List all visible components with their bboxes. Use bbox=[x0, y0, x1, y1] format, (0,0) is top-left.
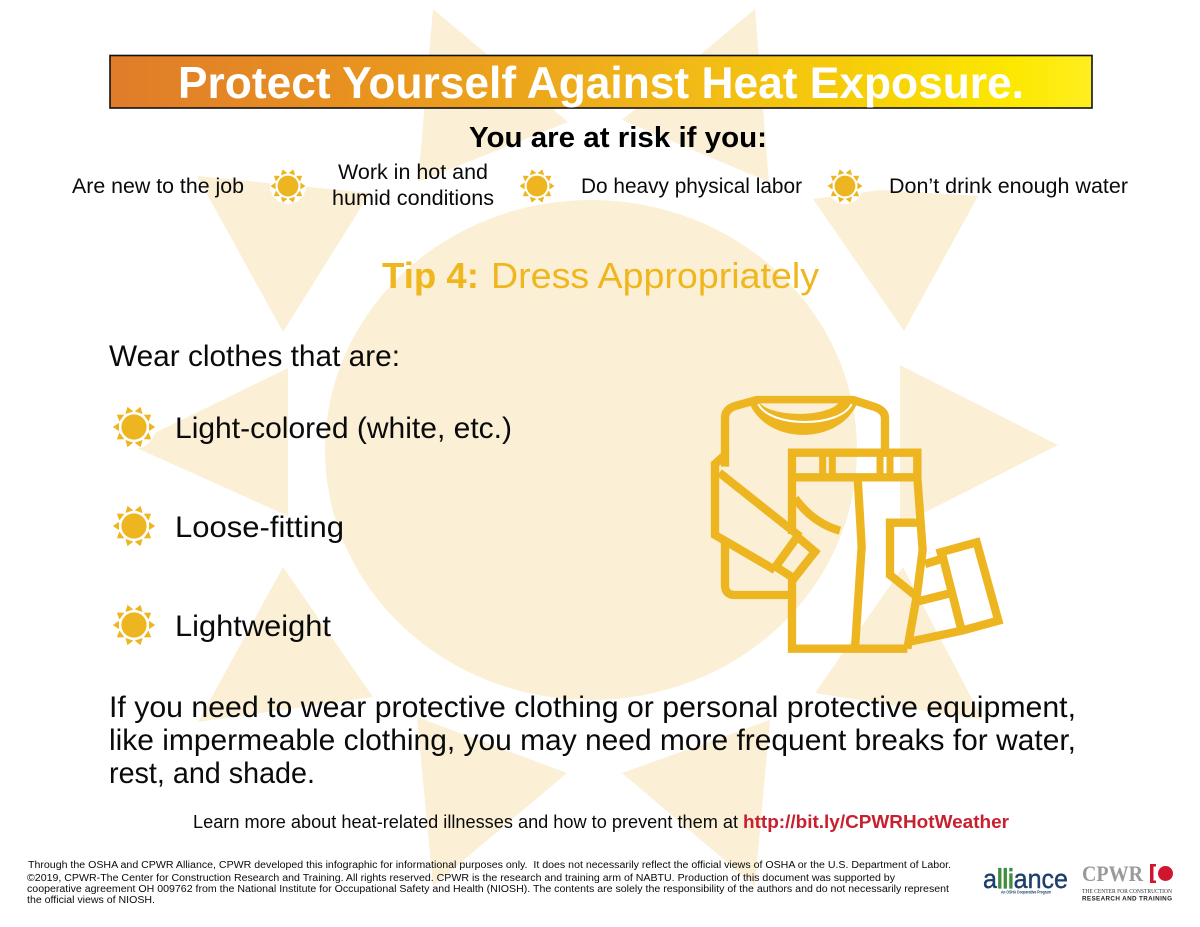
heading: risk factors: You are at risk if you: bbox=[469, 122, 767, 154]
paragraph: protective clothing bbox=[109, 691, 1076, 790]
paragraph: protective clothing: like impermeable clothing, you may need more frequent breaks for water, bbox=[109, 724, 1076, 757]
risk: heavy physical labor: Do heavy physical labor bbox=[581, 175, 802, 198]
footer disclaimer: Through the OSHA and CPWR Alliance, CPWR developed this infographic for informational purposes only. It does not necessarily reflect the official views of OSHA or the U.S. Department of Labor. bbox=[28, 860, 951, 871]
logo: alliance: alliance bbox=[983, 864, 1068, 894]
icon: folded clothes bbox=[715, 400, 998, 649]
paragraph: protective clothing: rest, and shade. bbox=[109, 757, 315, 790]
footer disclaimer: the official views of NIOSH. bbox=[27, 895, 155, 906]
logo: CPWR: THE CENTER FOR CONSTRUCTION bbox=[1082, 888, 1172, 895]
logo: CPWR: RESEARCH AND TRAINING bbox=[1082, 896, 1172, 902]
background: pale sun watermark bbox=[130, 9, 1058, 886]
risk: hot and humid conditions: Work in hot and bbox=[338, 161, 488, 184]
clothing list bbox=[112, 405, 512, 647]
logo: CPWR bbox=[1082, 861, 1173, 902]
list item: loose-fitting: Loose-fitting bbox=[175, 511, 344, 544]
learn more line: Learn more about heat-related illnesses and how to prevent them at bbox=[193, 812, 738, 832]
tip heading: Tip 4: bbox=[382, 255, 479, 296]
risk: hot and humid conditions bbox=[332, 161, 494, 210]
logo: alliance: An OSHA Cooperative Program bbox=[1001, 890, 1051, 894]
risk factors row bbox=[72, 161, 1128, 210]
risk: new to the job: Are new to the job bbox=[72, 175, 244, 198]
title banner: Protect Yourself Against Heat Exposure. bbox=[178, 59, 1024, 108]
icon: sun bullet 1 bbox=[112, 405, 156, 449]
paragraph: protective clothing: If you need to wear protective clothing or personal protective equipment, bbox=[109, 691, 1076, 724]
icon: small sun 3 bbox=[827, 168, 863, 204]
footer disclaimer: cooperative agreement OH 009762 from the National Institute for Occupational Safety and Health (NIOSH). The contents are solely the responsibility of the authors and do not necessarily represent bbox=[27, 884, 949, 895]
icon: sun bullet 2 bbox=[112, 504, 156, 548]
logo: CPWR: CPWR bbox=[1082, 861, 1144, 886]
learn more line: http://bit.ly/CPWRHotWeather bbox=[743, 812, 1009, 832]
risk: not enough water: Don’t drink enough water bbox=[889, 175, 1128, 198]
footer disclaimer bbox=[27, 860, 951, 906]
list item: lightweight: Lightweight bbox=[175, 610, 332, 643]
list item: light-colored: Light-colored (white, etc.) bbox=[175, 412, 512, 445]
intro text: Wear clothes that are: bbox=[109, 340, 400, 373]
icon: sun bullet 3 bbox=[112, 603, 156, 647]
footer disclaimer: ©2019, CPWR-The Center for Construction Research and Training. All rights reserved. CPWR is the research and training arm of NABTU. Production of this document was supported by bbox=[27, 873, 895, 884]
tip heading: Dress Appropriately bbox=[491, 255, 819, 296]
learn more line bbox=[193, 812, 1009, 832]
icon: small sun 2 bbox=[519, 168, 555, 204]
icon: small sun 1 bbox=[270, 168, 306, 204]
risk: hot and humid conditions: humid conditions bbox=[332, 187, 494, 210]
